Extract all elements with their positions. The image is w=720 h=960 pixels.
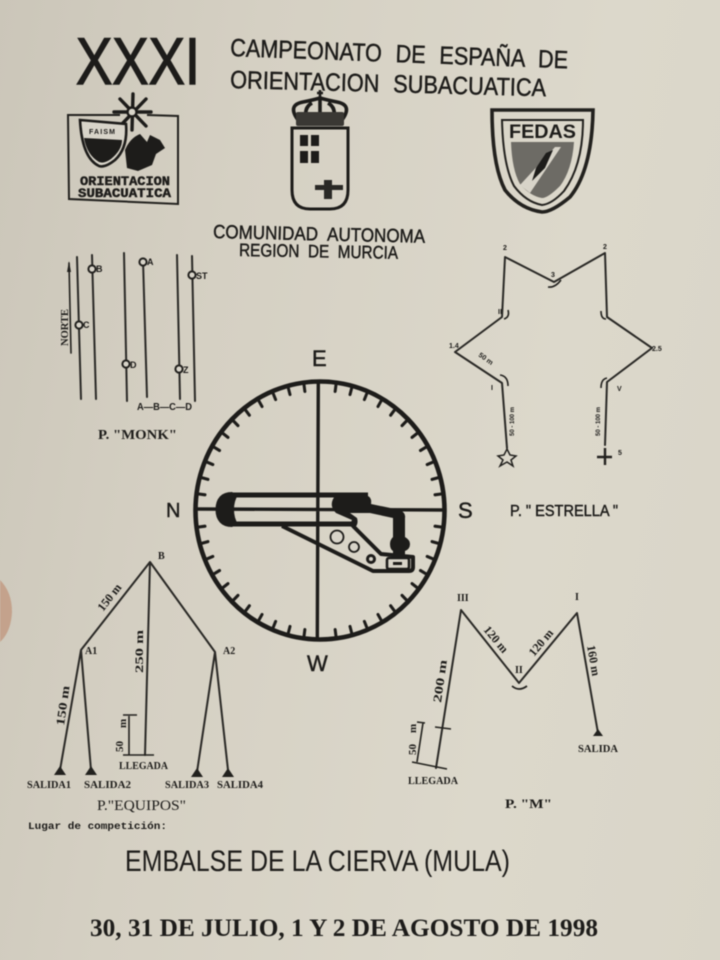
- point labels: 150 m: [53, 685, 73, 726]
- heading: comunidad autonoma: REGION DE MURCIA: [239, 240, 398, 263]
- logo: orientacion subacuatica: ORIENTACION: [80, 174, 170, 189]
- logo: FEDAS shield: FEDAS: [509, 122, 576, 143]
- roman numerals and distances: 160 m: [584, 644, 603, 677]
- diagram: P. Estrella star course: [449, 244, 662, 520]
- needle body outline: [218, 495, 368, 524]
- roman numerals and distances: 200 m: [430, 659, 450, 703]
- point labels: A2: [223, 646, 235, 657]
- diagram: P. Monk: [60, 253, 208, 443]
- diagram: P. M: [407, 592, 618, 811]
- leg labels: 50 - 100 m: [596, 407, 602, 436]
- cross emblem: [315, 180, 343, 199]
- grey field: [511, 142, 574, 198]
- point labels: 150 m: [94, 581, 124, 614]
- finish ticks and 50 m marker: [412, 722, 451, 769]
- cardinal letters: E: [312, 346, 327, 371]
- turn arcs: [500, 280, 607, 388]
- leg labels: 2.5: [652, 346, 662, 353]
- shield outline: [292, 128, 348, 209]
- crown band: [296, 112, 344, 126]
- title: championship name: [230, 33, 569, 102]
- control labels: B: [96, 264, 103, 274]
- title: championship name: ORIENTACION SUBACUATICA: [230, 66, 547, 102]
- location label: Lugar de competición:: [28, 821, 167, 833]
- start and finish names: [27, 760, 263, 791]
- point labels: B: [158, 551, 165, 562]
- roman numerals and distances: [407, 592, 603, 755]
- leg labels: 1.4: [449, 343, 459, 350]
- scale circles: [330, 530, 374, 562]
- roman numerals and distances: 120 m: [526, 626, 556, 659]
- lower diagonal arm: [282, 526, 413, 571]
- control labels: C: [83, 320, 90, 330]
- point labels: m: [117, 719, 129, 728]
- cardinal letters: W: [307, 651, 328, 676]
- point labels: [53, 551, 235, 752]
- start and finish names: LLEGADA: [408, 775, 458, 787]
- crown cross: [317, 90, 323, 99]
- crown arches: [294, 98, 346, 120]
- leg labels: 50 m: [477, 352, 494, 367]
- start and finish names: SALIDA: [578, 743, 618, 755]
- control labels: Z: [183, 365, 189, 375]
- title: championship name: CAMPEONATO DE ESPAÑA DE: [230, 33, 569, 74]
- cardinal letters: [166, 346, 473, 676]
- roman numerals and distances: II: [515, 665, 523, 676]
- compass ring: [196, 382, 444, 640]
- title: XXXI numeral: XXXI: [76, 24, 200, 98]
- shield dark lower field: [84, 138, 122, 163]
- control labels: D: [130, 360, 137, 370]
- venue heading: EMBALSE DE LA CIERVA (MULA): [125, 845, 510, 878]
- roman numerals and distances: III: [457, 593, 469, 604]
- logo: Region de Murcia coat of arms: [292, 90, 348, 209]
- star burst: [114, 94, 151, 130]
- leg labels: 3: [551, 272, 555, 279]
- control labels: [83, 257, 208, 375]
- start star: [498, 449, 516, 466]
- diver silhouette: [125, 134, 165, 171]
- white diagonal band with diver: [520, 147, 561, 193]
- compass: [166, 346, 473, 676]
- point labels: 250 m: [132, 630, 146, 673]
- control labels: A: [147, 257, 154, 267]
- leg labels: II: [498, 309, 502, 316]
- castles: [300, 135, 319, 163]
- heading: comunidad autonoma: COMUNIDAD AUTONOMA: [213, 222, 426, 248]
- control labels: ST: [196, 271, 208, 281]
- start and finish names: SALIDA2: [84, 779, 131, 791]
- logo: orientacion subacuatica: SUBACUATICA: [78, 186, 171, 201]
- diagram: P. Equipos: P."EQUIPOS": [97, 798, 186, 814]
- finish cross: [597, 448, 612, 465]
- cardinal letters: N: [166, 500, 180, 522]
- start and finish names: SALIDA3: [165, 779, 209, 791]
- diagram: P. Equipos: [27, 551, 263, 814]
- leg labels: 50 - 100 m: [510, 407, 516, 436]
- FAISM shield: [80, 120, 126, 166]
- start triangle: [593, 729, 603, 736]
- logo: FEDAS shield: [492, 110, 593, 212]
- leg labels: 5: [618, 450, 622, 457]
- start and finish names: SALIDA1: [27, 779, 71, 791]
- dial window: [387, 558, 409, 569]
- turn marker arc: [512, 686, 527, 689]
- point labels: 50: [114, 740, 126, 752]
- leg labels: V: [617, 386, 622, 393]
- diagram: P. Monk: P. "MONK": [98, 428, 177, 443]
- diagram: P. M: P. "M": [505, 796, 552, 811]
- leg labels: 2: [603, 244, 607, 251]
- roman numerals and distances: 120 m: [481, 623, 511, 656]
- parallel course lines: [77, 253, 195, 401]
- cross hairs: [195, 381, 445, 640]
- start and finish names: SALIDA4: [217, 779, 263, 791]
- north arrow: [60, 261, 71, 353]
- logo: orientacion subacuatica: FAISM: [89, 129, 115, 136]
- control points: [75, 258, 196, 373]
- logo: orientacion subacuatica: [68, 94, 178, 204]
- finger at left edge of the photo: [0, 580, 12, 642]
- heading: comunidad autonoma: [213, 222, 426, 263]
- north arrow: NORTE: [60, 309, 71, 346]
- start and finish names: LLEGADA: [119, 760, 168, 772]
- diagram: P. Monk: A—B—C—D: [137, 402, 192, 413]
- leg labels: [449, 244, 662, 457]
- leg labels: I: [491, 385, 493, 392]
- roman numerals and distances: I: [575, 592, 579, 603]
- roman numerals and distances: 50: [407, 744, 419, 755]
- diagram: P. Estrella star course: P. " ESTRELLA ": [510, 503, 618, 520]
- point labels: A1: [85, 646, 97, 657]
- pivot blob and arm: [332, 496, 410, 556]
- start and finish names: [408, 743, 618, 787]
- needle left cap: [216, 492, 238, 527]
- leg labels: 2: [503, 245, 507, 252]
- cardinal letters: S: [458, 498, 473, 523]
- degree ticks: [197, 383, 443, 638]
- roman numerals and distances: m: [407, 724, 419, 733]
- start triangles: [54, 766, 234, 777]
- dates: 30, 31 DE JULIO, 1 Y 2 DE AGOSTO DE 1998: [90, 915, 598, 942]
- finish line and 50 m marker: [123, 715, 154, 755]
- needle: [216, 492, 413, 571]
